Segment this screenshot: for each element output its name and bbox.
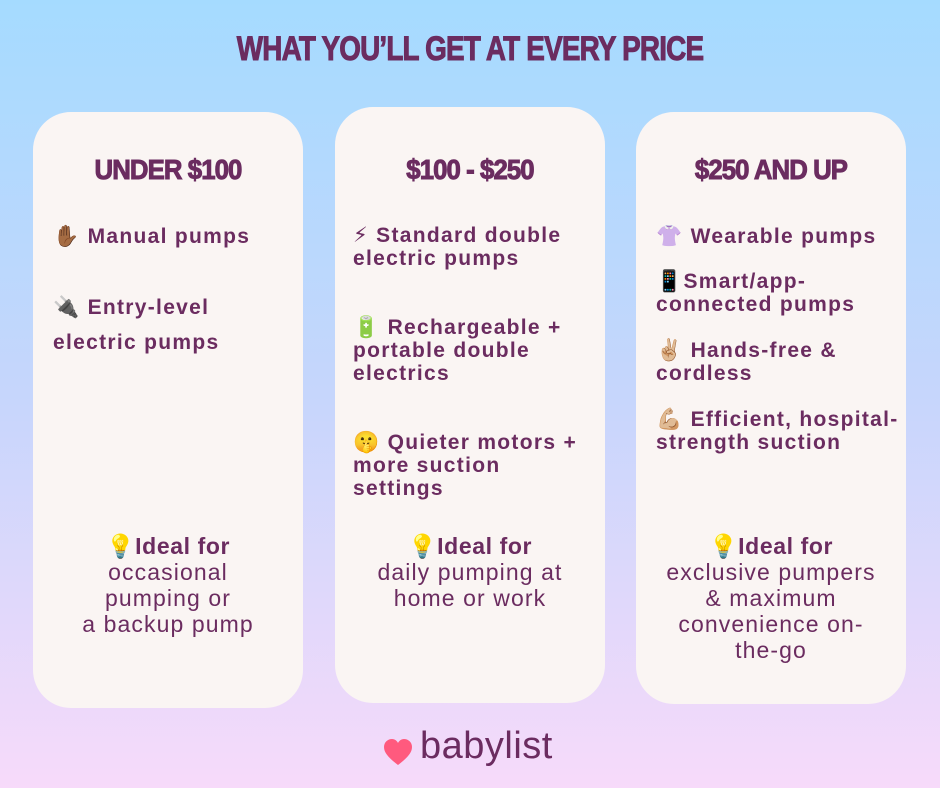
item: standard double: electric pumps	[353, 247, 519, 270]
ideal for: daily pumping at	[377, 559, 563, 585]
item: efficient: 💪🏼 Efficient, hospital-	[656, 408, 899, 431]
item: entry-level: electric pumps	[53, 331, 219, 354]
ideal for: occasional	[108, 559, 228, 585]
ideal for: pumping or	[105, 585, 231, 611]
item: quieter motors: 🤫 Quieter motors +	[353, 431, 577, 454]
item: quieter motors: more suction	[353, 454, 500, 477]
item: rechargeable	[353, 315, 562, 385]
ideal for: & maximum	[705, 585, 837, 611]
icon: heart	[384, 739, 412, 765]
item: standard double: ⚡ Standard double	[353, 224, 561, 247]
item: smart: connected pumps	[656, 293, 855, 316]
item: efficient: strength suction	[656, 431, 841, 454]
ideal for: a backup pump	[82, 611, 254, 637]
heading: UNDER $100	[95, 154, 241, 185]
ideal for	[666, 533, 876, 663]
wordmark: babylist	[420, 725, 553, 767]
item: standard double	[353, 224, 561, 270]
ideal for: 💡Ideal for	[408, 533, 532, 559]
heading: $250 AND UP	[695, 154, 847, 185]
item: manual pumps: ✋🏾 Manual pumps	[53, 225, 250, 248]
item: hands-free	[656, 338, 837, 385]
item: quieter motors	[353, 430, 577, 500]
item: rechargeable: 🔋 Rechargeable +	[353, 316, 562, 339]
panel: $100-$250	[335, 107, 605, 703]
panel: under $100	[33, 112, 303, 708]
ideal for: convenience on-	[678, 611, 864, 637]
ideal for: the-go	[735, 637, 807, 663]
item: smart: 📱Smart/app-	[656, 270, 806, 293]
item: rechargeable: portable double	[353, 339, 530, 362]
item: entry-level: 🔌 Entry-level	[53, 296, 209, 319]
heading: $100 - $250	[406, 154, 534, 185]
ideal for: home or work	[394, 585, 546, 611]
ideal for: 💡Ideal for	[709, 533, 833, 559]
panel: $250 and up	[636, 112, 906, 704]
item: smart	[656, 269, 855, 316]
ideal for: exclusive pumpers	[666, 559, 876, 585]
item: wearable: 👚 Wearable pumps	[656, 225, 876, 248]
item: rechargeable: electrics	[353, 362, 450, 385]
item: entry-level	[53, 295, 219, 354]
ideal for	[377, 533, 563, 611]
item: hands-free: ✌🏼 Hands-free &	[656, 339, 837, 362]
item: efficient	[656, 408, 899, 454]
item: hands-free: cordless	[656, 362, 753, 385]
ideal for: 💡Ideal for	[106, 533, 230, 559]
ideal for	[82, 533, 254, 637]
item: quieter motors: settings	[353, 477, 444, 500]
title: WHAT YOU’LL GET AT EVERY PRICE	[237, 30, 703, 68]
logo: babylist	[384, 725, 553, 767]
